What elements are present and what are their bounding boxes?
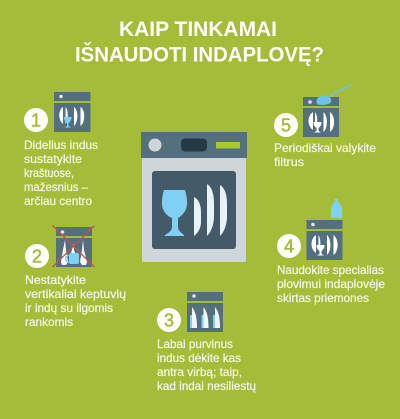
text 2: ir indų su ilgomis bbox=[25, 302, 113, 315]
number badge 5: 5 bbox=[281, 116, 291, 136]
number badge 4: 4 bbox=[284, 236, 294, 256]
text 5: filtrus bbox=[274, 156, 304, 169]
number badge 3: 3 bbox=[164, 310, 174, 330]
icon: dishwasher with scoop of powder bbox=[303, 84, 351, 137]
text 1: kraštuose, bbox=[24, 167, 74, 180]
step 4 bbox=[277, 199, 385, 305]
text 1: sustatykite bbox=[24, 153, 82, 166]
text 3: indus dėkite kas bbox=[157, 352, 241, 365]
text 1: arčiau centro bbox=[24, 195, 92, 208]
title bbox=[75, 18, 324, 66]
icon: wine glass bbox=[162, 190, 187, 236]
text 2: rankomis bbox=[25, 316, 73, 329]
number badge 1: 1 bbox=[31, 110, 41, 130]
text 3 bbox=[157, 338, 256, 393]
text 5 bbox=[274, 142, 376, 169]
text 1: Didelius indus bbox=[24, 139, 98, 152]
step 5 bbox=[274, 84, 376, 169]
text 3: Labai purvinus bbox=[157, 338, 233, 351]
text 2: Nestatykite bbox=[25, 274, 86, 287]
main dishwasher illustration bbox=[141, 132, 247, 262]
icon: plates bbox=[194, 184, 227, 236]
title: IŠNAUDOTI INDAPLOVĘ? bbox=[75, 42, 324, 66]
text 4: Naudokite specialias bbox=[277, 264, 384, 277]
text 2: vertikaliai keptuvių bbox=[25, 288, 126, 301]
text 1: mažesnius – bbox=[24, 181, 89, 194]
text 4: plovimui indaplovėje bbox=[277, 278, 385, 291]
text 5: Periodiškai valykite bbox=[274, 142, 376, 155]
icon: dishwasher with detergent bottle bbox=[306, 199, 342, 260]
step 3 bbox=[157, 292, 256, 393]
icon: dishwasher with plates at edges bbox=[54, 92, 90, 132]
step 1 bbox=[24, 92, 98, 208]
text 2 bbox=[25, 274, 126, 329]
text 4: skirtas priemones bbox=[277, 292, 369, 305]
text 3: antra virbą; taip, bbox=[157, 366, 242, 379]
number badge 2: 2 bbox=[32, 246, 42, 266]
text 4 bbox=[277, 264, 385, 305]
title: KAIP TINKAMAI bbox=[119, 18, 277, 41]
text 3: kad indai nesiliestų bbox=[157, 380, 256, 393]
step 2 bbox=[25, 226, 126, 329]
icon: crossed-out dishwasher bbox=[52, 226, 94, 267]
text 1 bbox=[24, 139, 98, 208]
icon: dishwasher with spaced plates bbox=[187, 292, 223, 332]
